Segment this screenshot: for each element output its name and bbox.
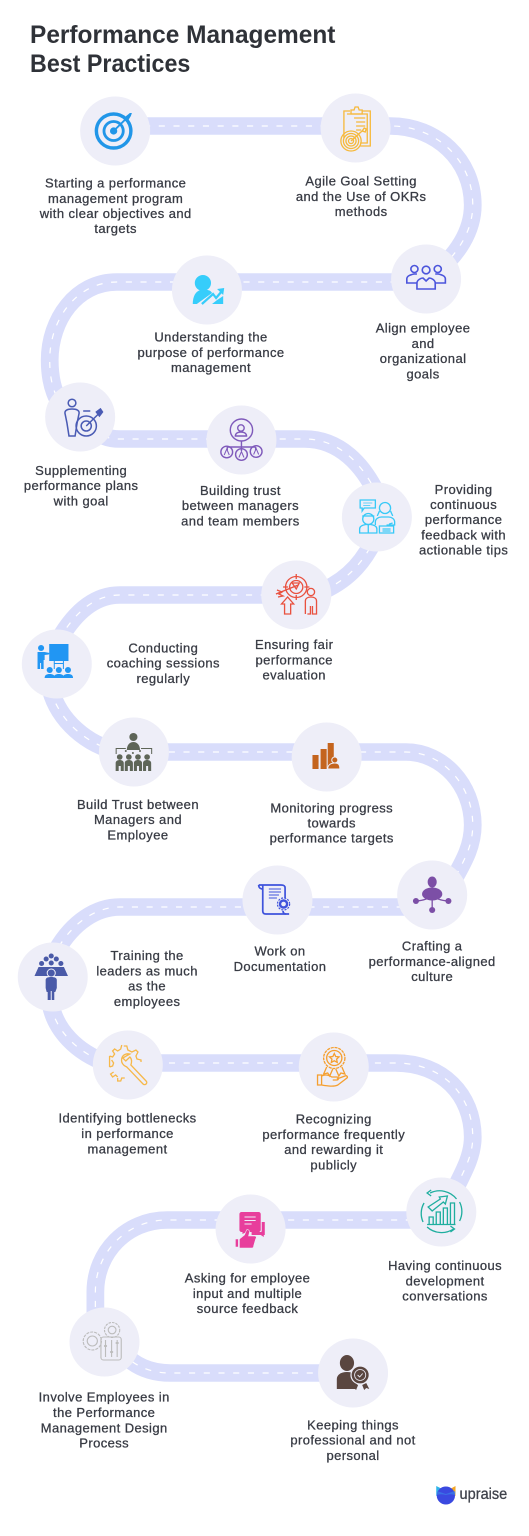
label: step 19: Involve Employees in — [39, 1390, 170, 1405]
label: step 17: development — [406, 1273, 485, 1288]
label: step 16: and rewarding it — [284, 1142, 383, 1157]
label: step 4: management — [171, 360, 251, 375]
icon: three people — [407, 266, 445, 289]
label: step 8: evaluation — [263, 668, 326, 683]
label: step 15: management — [88, 1141, 168, 1156]
label: step 5: performance plans — [24, 478, 138, 493]
label: step 17: conversations — [402, 1289, 488, 1303]
step 20: professional not personal — [290, 1338, 416, 1463]
step 9: coaching sessions — [22, 630, 220, 698]
label: step 10: Managers and — [94, 812, 182, 827]
title: Best Practices — [30, 50, 190, 78]
label: step 14: as the — [128, 979, 166, 993]
label: step 7: feedback with — [421, 527, 506, 542]
label: step 4: purpose of performance — [137, 345, 285, 360]
label: step 20: professional and not — [290, 1433, 416, 1447]
step 16: recognizing performance — [262, 1032, 405, 1172]
icon: team network — [221, 419, 262, 460]
label: step 7: performance — [425, 512, 502, 527]
step 4: understanding the purpose — [137, 256, 285, 375]
label: step 20: Keeping things — [307, 1417, 399, 1432]
label: step 14: leaders as much — [96, 963, 198, 978]
icon: clipboard with target — [341, 107, 370, 151]
label: step 7: continuous — [430, 497, 497, 512]
label: step 12: performance-aligned — [369, 954, 496, 969]
label: step 12: culture — [411, 969, 453, 984]
label: step 7: Providing — [435, 482, 493, 497]
icon: person with badge — [337, 1355, 369, 1390]
label: step 8: Ensuring fair — [255, 637, 334, 652]
label: step 10: Employee — [107, 827, 169, 842]
label: step 15: in performance — [81, 1126, 174, 1141]
label: step 3: and — [412, 336, 435, 351]
label: step 16: performance frequently — [262, 1127, 405, 1142]
label: step 7: actionable tips — [419, 543, 508, 557]
step 11: monitoring progress — [270, 722, 394, 846]
label: step 2: Agile Goal Setting — [305, 174, 417, 188]
label: step 6: Building trust — [200, 483, 281, 498]
icon: bars with person — [312, 743, 340, 769]
label: step 11: towards — [308, 816, 356, 830]
label: step 1: targets — [94, 221, 137, 236]
label: step 3: goals — [406, 366, 440, 381]
step 18: employee input — [185, 1194, 310, 1316]
label: step 6: between managers — [182, 498, 299, 513]
label: step 8: performance — [255, 652, 333, 667]
label: step 3: Align employee — [376, 321, 470, 335]
label: step 11: Monitoring progress — [270, 800, 393, 815]
label: step 16: publicly — [310, 1157, 357, 1172]
label: step 19: Process — [79, 1436, 129, 1450]
icon: person with rising arrow — [193, 275, 224, 304]
label: step 5: Supplementing — [35, 463, 127, 478]
icon: leader with crowd — [34, 954, 68, 1000]
icon: medal over hand — [318, 1048, 347, 1086]
title — [30, 21, 336, 78]
step 14: training leaders — [18, 942, 198, 1012]
logo: upraise: upraise — [460, 1485, 507, 1503]
label: step 15: Identifying bottlenecks — [58, 1111, 197, 1126]
label: step 5: with goal — [53, 494, 109, 508]
label: step 11: performance targets — [270, 831, 394, 846]
label: step 12: Crafting a — [402, 939, 463, 954]
step 2: agile goal setting — [296, 94, 426, 219]
label: step 16: Recognizing — [296, 1112, 372, 1126]
label: step 2: methods — [335, 204, 388, 219]
icon: gear and wrench — [110, 1045, 147, 1085]
label: step 13: Documentation — [234, 959, 326, 974]
label: step 18: Asking for employee — [185, 1271, 310, 1286]
step 13: documentation — [234, 866, 326, 974]
icon: target — [96, 113, 132, 148]
road: winding path connecting all steps — [50, 126, 473, 1373]
label: step 3: organizational — [380, 351, 466, 366]
label: step 13: Work on — [254, 944, 306, 959]
label: step 1: management program — [48, 191, 183, 206]
icon: chat with thumbs up — [235, 1212, 265, 1248]
label: step 19: the Performance — [53, 1405, 155, 1420]
step 3: align employee goals — [376, 244, 470, 381]
step 19: involve employees — [39, 1308, 170, 1450]
label: step 18: source feedback — [197, 1301, 298, 1316]
icon: two people with chat — [360, 500, 395, 533]
icon: person with network nodes — [413, 876, 451, 913]
step 6: building trust — [181, 406, 300, 528]
label: step 1: Starting a performance — [45, 176, 186, 190]
step 7: continuous feedback — [342, 482, 508, 557]
step 1: clear objectives — [39, 96, 192, 236]
label: step 20: personal — [326, 1448, 380, 1463]
step 15: identifying bottlenecks — [58, 1030, 197, 1156]
label: step 2: and the Use of OKRs — [296, 189, 426, 204]
icon: gears and sliders — [83, 1322, 121, 1360]
step 12: performance culture — [369, 860, 496, 984]
icon: scroll with gear — [259, 885, 290, 914]
step 10: build trust — [77, 718, 199, 842]
label: step 10: Build Trust between — [77, 797, 199, 812]
label: step 9: coaching sessions — [107, 656, 220, 671]
icon: leader and team — [116, 733, 152, 771]
icon: chart in circular arrows — [421, 1190, 462, 1233]
icon: person with target — [65, 399, 102, 436]
label: step 1: with clear objectives and — [39, 206, 192, 221]
label: step 4: Understanding the — [154, 330, 268, 344]
step 8: fair evaluation — [255, 560, 334, 683]
icon: target, arrow up and person — [276, 574, 317, 614]
logo: upraise — [436, 1485, 507, 1504]
label: step 9: regularly — [137, 671, 190, 686]
label: step 6: and team members — [181, 513, 300, 528]
label: step 17: Having continuous — [388, 1258, 502, 1273]
label: step 19: Management Design — [41, 1420, 168, 1435]
label: step 14: Training the — [111, 948, 184, 963]
step 5: supplementing plans — [24, 382, 138, 508]
step 17: development conversations — [388, 1178, 502, 1303]
label: step 9: Conducting — [128, 641, 198, 655]
icon: presenter with board and audience — [38, 644, 73, 678]
label: step 18: input and multiple — [193, 1286, 302, 1301]
title: Performance Management — [30, 21, 336, 49]
label: step 14: employees — [114, 994, 180, 1009]
